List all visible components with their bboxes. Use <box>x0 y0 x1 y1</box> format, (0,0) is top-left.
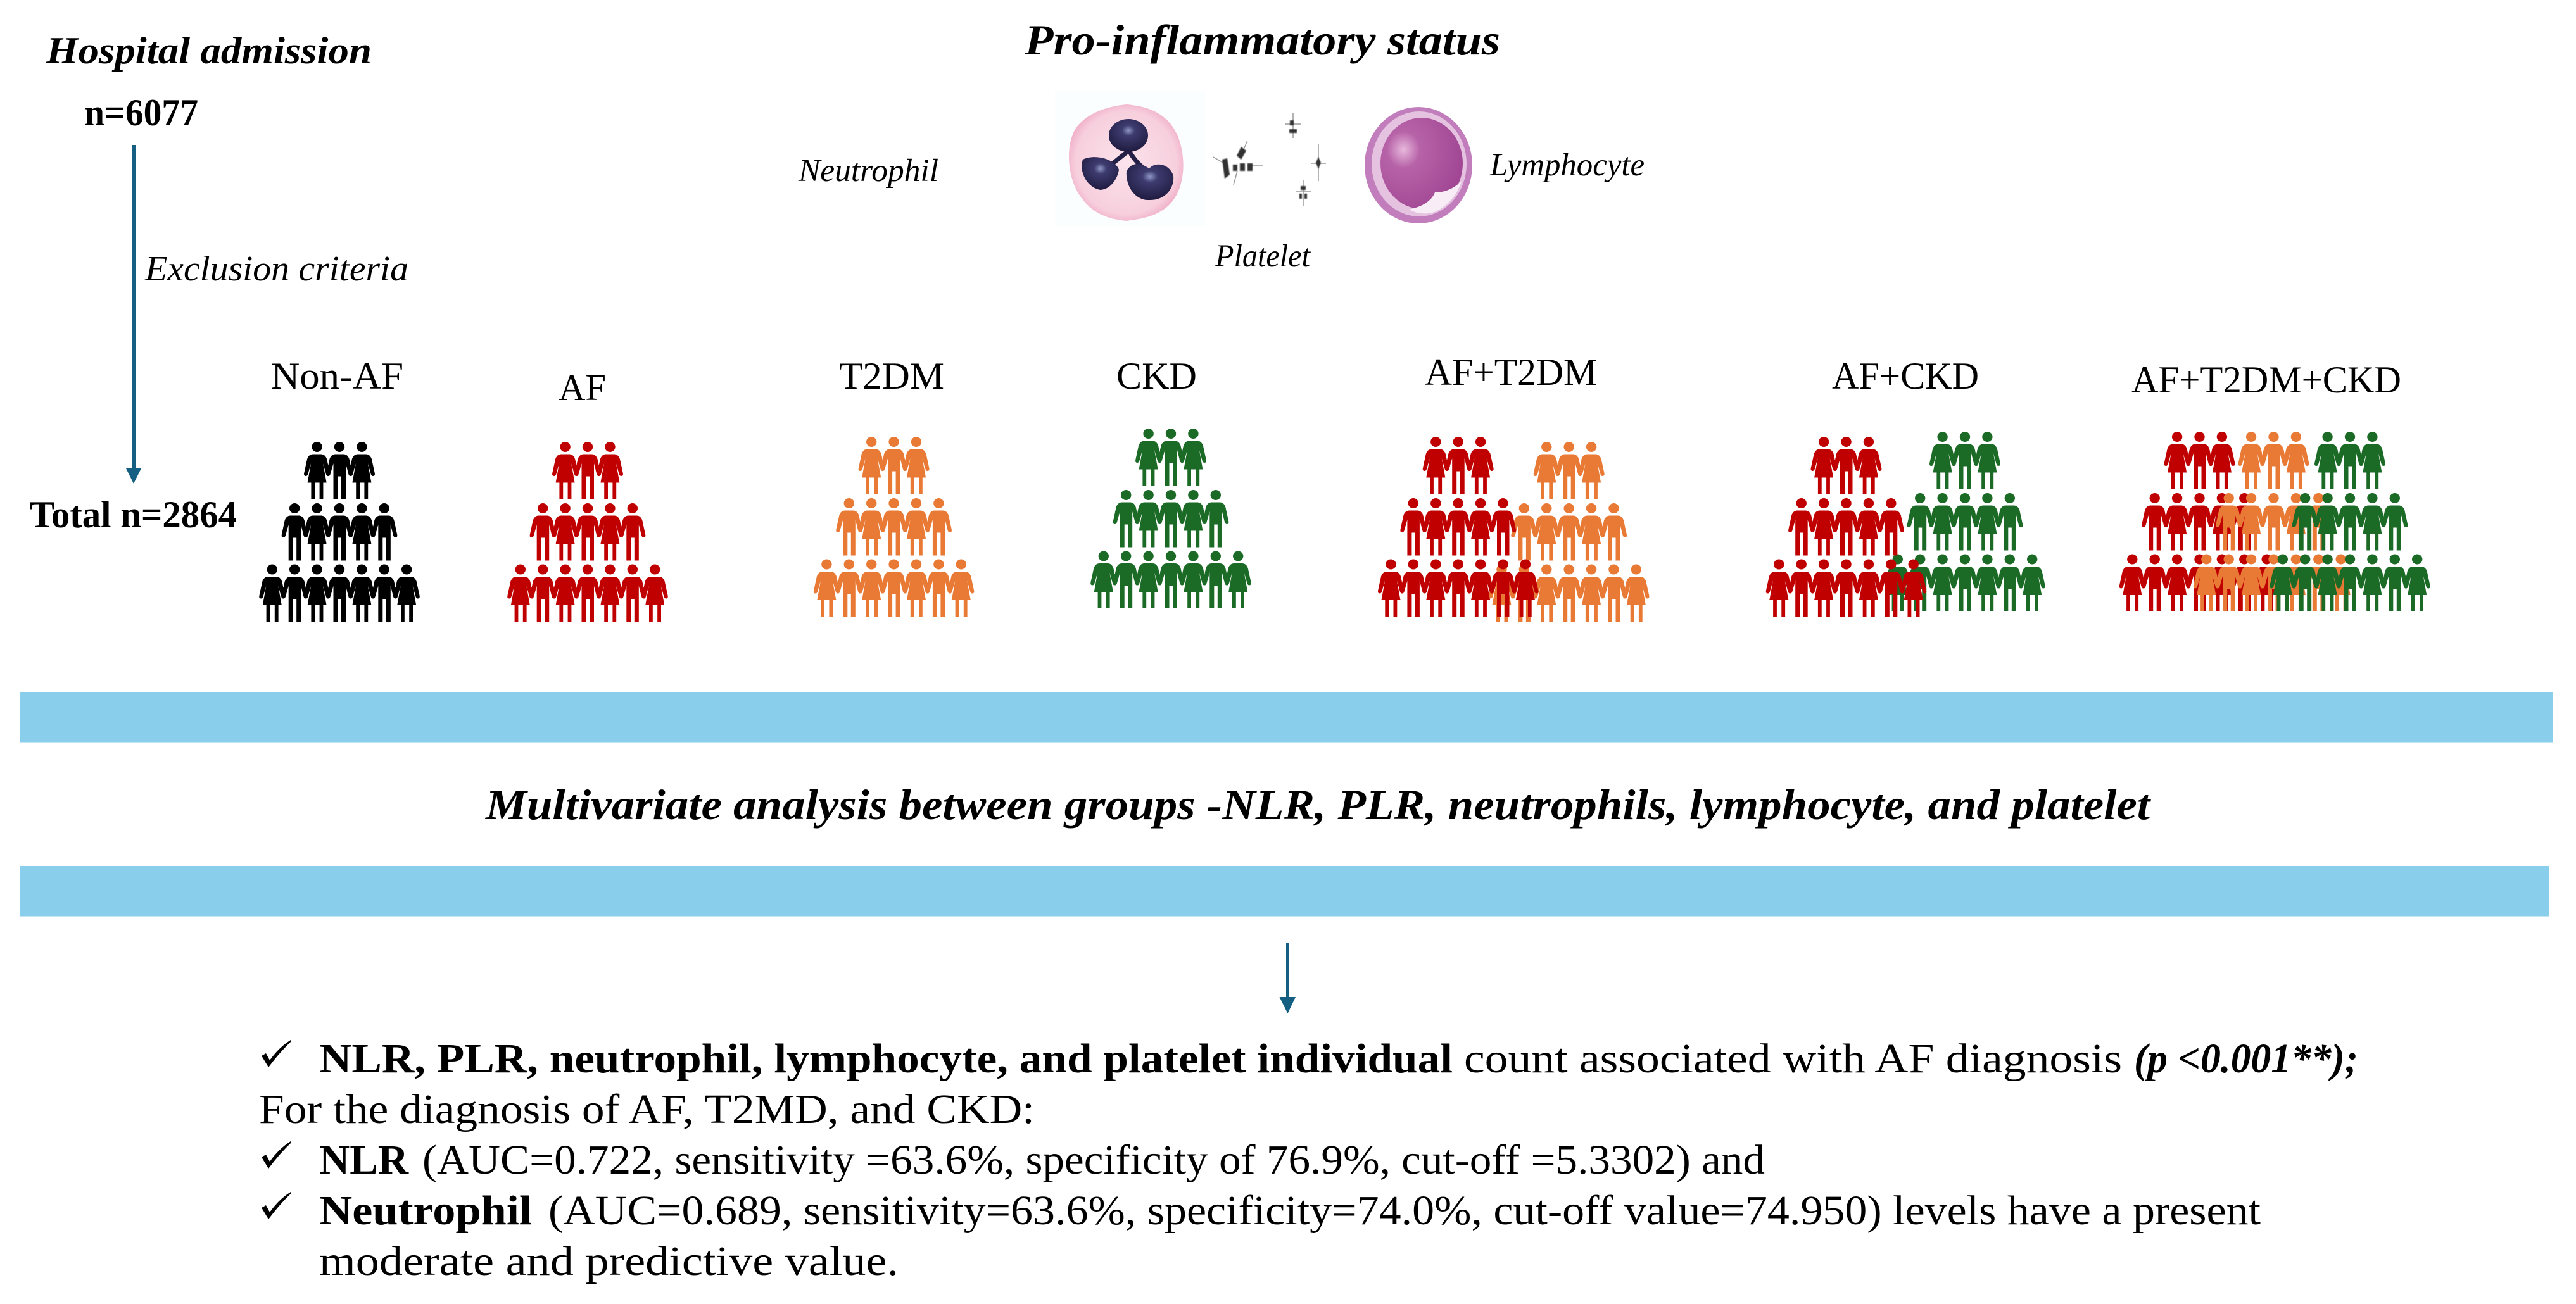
group: AF+CKD: AF+CKD <box>1832 355 1979 397</box>
group: AF+T2DM+CKD <box>2119 359 2430 611</box>
finding: individual counts: count associated with AF diagnosis <box>1464 1036 2122 1082</box>
top blue band <box>20 692 2553 742</box>
group: AF <box>507 367 668 622</box>
finding: NLR: NLR <box>319 1137 409 1183</box>
group: Non-AF <box>259 355 420 622</box>
icon: check mark 3 <box>262 1192 291 1219</box>
line: predictive value: moderate and predictive value. <box>319 1238 899 1284</box>
icon: platelets <box>1213 113 1326 206</box>
group: CKD <box>1090 355 1251 608</box>
heading: hospital admission: Hospital admission <box>46 30 372 72</box>
total count: Total n=2864 <box>30 494 237 536</box>
bottom blue band <box>20 866 2549 917</box>
finding: individual counts: (p <0.001**); <box>2134 1036 2358 1082</box>
group: AF+CKD <box>1766 355 2045 617</box>
admission count: n=6077 <box>84 92 198 134</box>
group: AF+T2DM: AF+T2DM <box>1425 351 1597 393</box>
group: Non-AF: Non-AF <box>271 355 403 397</box>
finding: individual counts <box>319 1036 2358 1082</box>
icon: check mark 1 <box>262 1040 291 1067</box>
finding: individual counts: NLR, PLR, neutrophil, lymphocyte, and platelet individual <box>319 1036 1453 1082</box>
icon: lymphocyte cell <box>1365 107 1472 223</box>
finding: neutrophil: Neutrophil <box>319 1188 532 1234</box>
group: AF+T2DM+CKD: AF+T2DM+CKD <box>2131 359 2401 401</box>
exclusion criteria label: Exclusion criteria <box>144 249 408 289</box>
arrow: to conclusions <box>1279 943 1296 1013</box>
arrow: exclusion flow <box>125 145 142 484</box>
group: T2DM: T2DM <box>839 355 944 397</box>
group: T2DM <box>814 355 974 617</box>
heading: pro-inflammatory status: Pro-inflammatory status <box>1024 16 1500 64</box>
group: AF+T2DM <box>1378 351 1649 622</box>
heading: multivariate analysis: Multivariate analysis between groups -NLR, PLR, neutrophils, lymphocyte, and platelet <box>485 781 2151 829</box>
finding: neutrophil: (AUC=0.689, sensitivity=63.6%, specificity=74.0%, cut-off value=74.950) levels have a present <box>548 1188 2261 1234</box>
conclusions text block <box>259 1036 2358 1284</box>
icon: neutrophil cell <box>1055 91 1205 226</box>
finding: NLR: (AUC=0.722, sensitivity =63.6%, specificity of 76.9%, cut-off =5.3302) and <box>422 1137 1765 1183</box>
label: platelet: Platelet <box>1215 239 1311 274</box>
line: diagnosis intro: For the diagnosis of AF, T2MD, and CKD: <box>259 1086 1035 1132</box>
group: CKD: CKD <box>1116 355 1197 397</box>
group: AF: AF <box>559 367 606 408</box>
icon: check mark 2 <box>262 1141 291 1169</box>
label: neutrophil: Neutrophil <box>798 153 938 189</box>
label: lymphocyte: Lymphocyte <box>1489 147 1645 183</box>
